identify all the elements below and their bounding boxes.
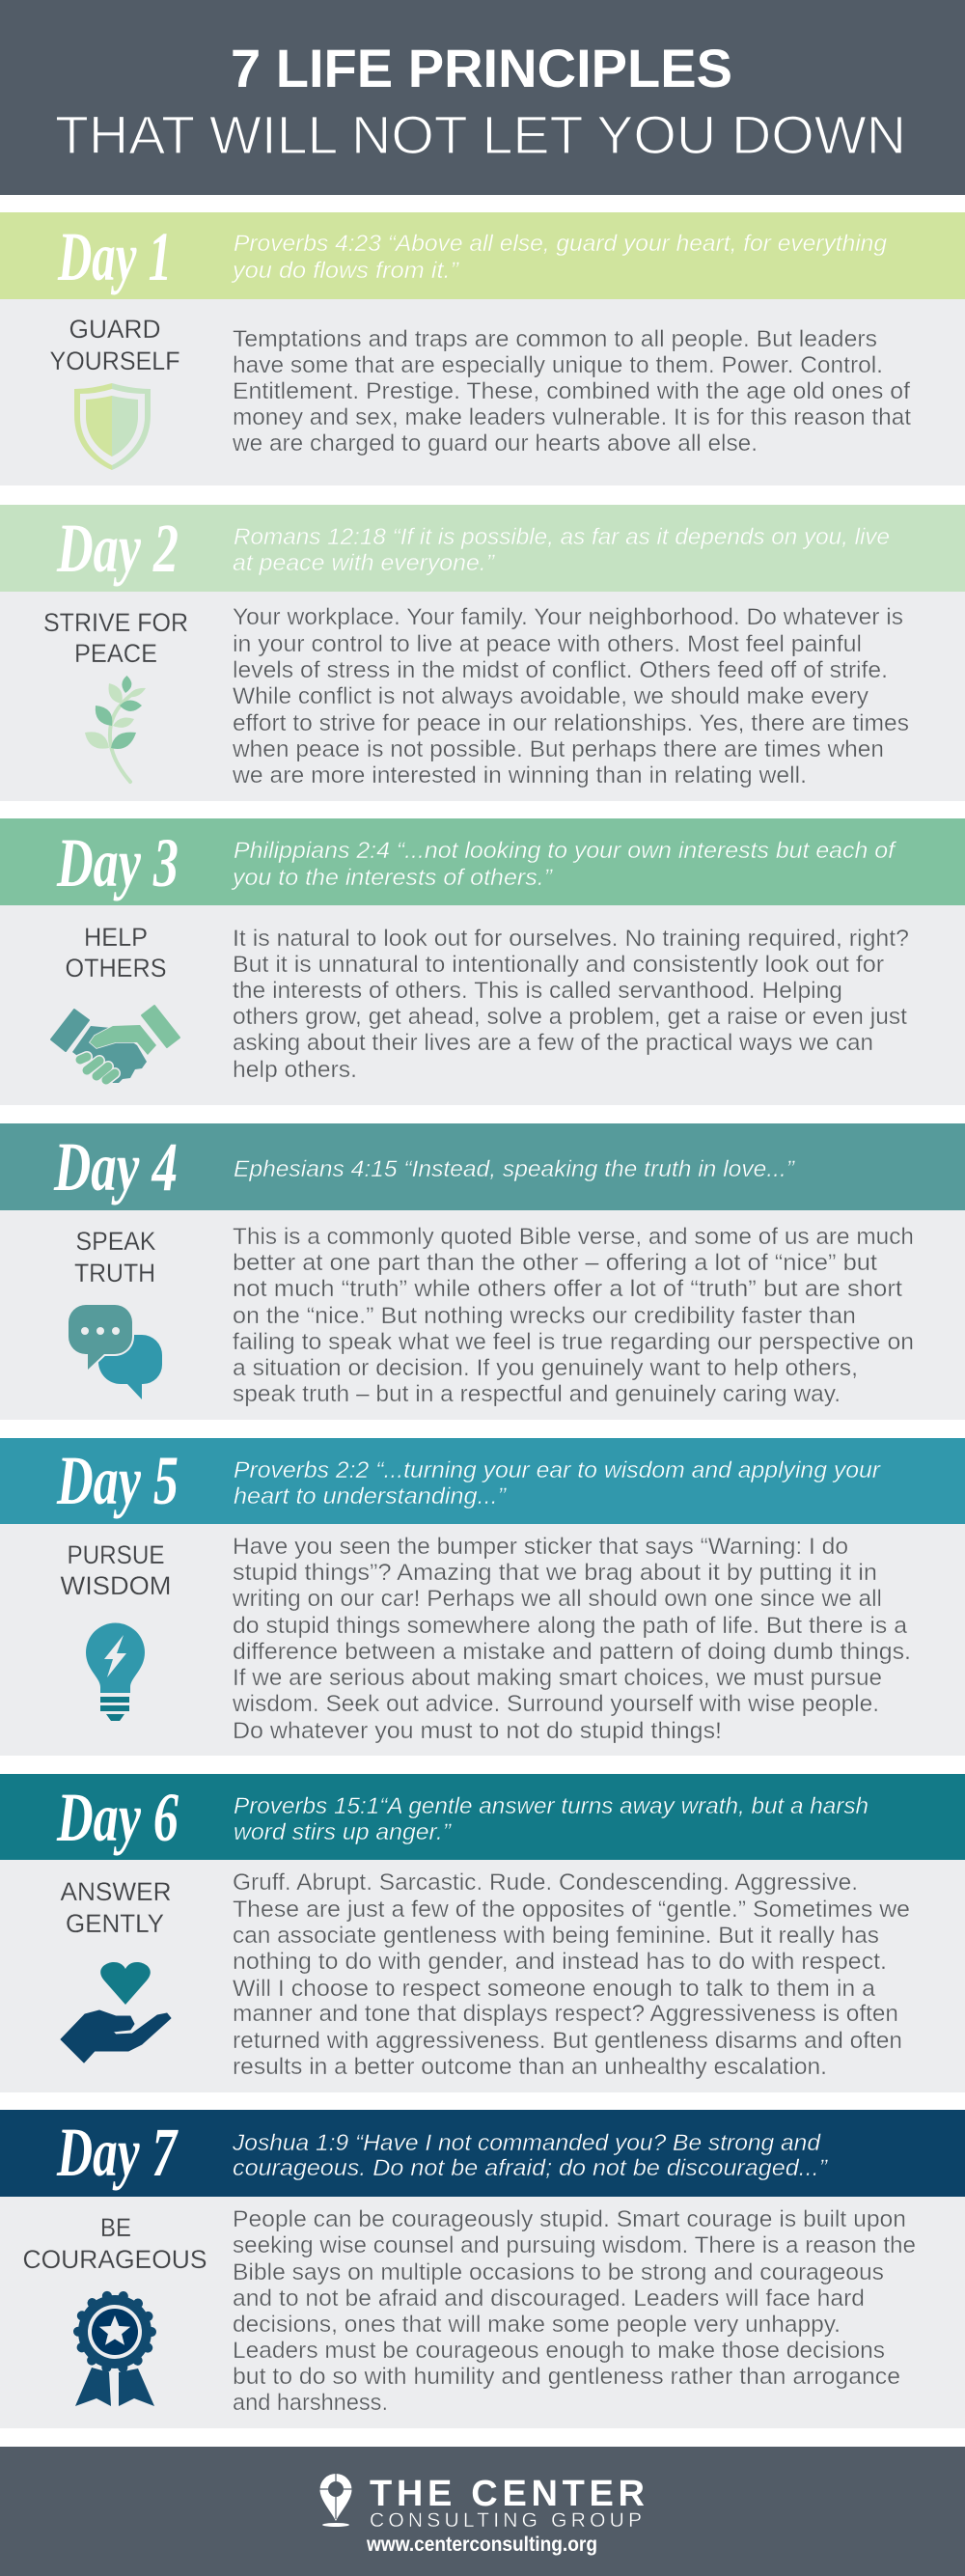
heading: guard yourself: GUARD: [69, 315, 160, 344]
body text: day 7: and harshness.: [233, 2390, 388, 2416]
heading: answer gently: ANSWER: [60, 1877, 172, 1906]
heading: be courageous: COURAGEOUS: [23, 2245, 207, 2274]
day 4 band: Day 4: [53, 1128, 178, 1205]
body text: day 7: seeking wise counsel and pursuing wisdom. There is a reason the: [233, 2232, 916, 2258]
logo wordmark: CONSULTING GROUP: [370, 2509, 642, 2532]
body text: day 5: [232, 1534, 911, 1744]
body text: day 4: on the “nice.” But nothing wrecks our credibility faster than: [233, 1303, 856, 1329]
day 5 band: heart to understanding...”: [234, 1483, 507, 1510]
day 3 band: [0, 818, 965, 905]
body text: day 5: Have you seen the bumper sticker that says “Warning: I do: [233, 1534, 848, 1560]
day 6 band: [0, 1774, 965, 1860]
panel: day 2 strive for peace: [0, 505, 965, 801]
body text: day 6: [233, 1870, 910, 2080]
day 5 band: Day 5: [56, 1442, 179, 1519]
heading: strive for peace: [43, 608, 188, 668]
icon: olive branch: [85, 676, 146, 782]
icon: handshake: [51, 1006, 179, 1083]
body text: day 1: Temptations and traps are common to all people. But leaders: [233, 326, 877, 352]
body text: day 3: help others.: [233, 1057, 357, 1083]
body text: day 3: others grow, get ahead, solve a problem, get a raise or even just: [233, 1004, 907, 1030]
heading: guard yourself: YOURSELF: [50, 346, 179, 375]
heading: answer gently: [60, 1877, 172, 1938]
body text: day 2: in your control to live at peace with others. Most feel painful: [233, 631, 862, 657]
heading: pursue wisdom: PURSUE: [68, 1540, 164, 1569]
body text: day 3: [233, 926, 909, 1083]
day 7 band: Day 7: [56, 2114, 179, 2191]
panel: day 4 speak truth: [0, 1123, 965, 1420]
body text: day 4: not much “truth” while others offer a lot of “truth” but are short: [233, 1276, 902, 1302]
logo wordmark: THE CENTER: [370, 2474, 645, 2514]
body text: day 5: difference between a mistake and pattern of doing dumb things.: [233, 1639, 911, 1665]
day 1 band: Proverbs 4:23 “Above all else, guard your heart, for everything: [234, 231, 888, 257]
day 5 band: Proverbs 2:2 “...turning your ear to wisdom and applying your: [234, 1457, 881, 1483]
body text: day 2: Your workplace. Your family. Your neighborhood. Do whatever is: [233, 604, 903, 630]
website url: www.centerconsulting.org: [366, 2534, 597, 2556]
body text: day 5: writing on our car! Perhaps we all should own one since we all: [232, 1586, 882, 1612]
body text: day 2: levels of stress in the midst of conflict. Others feed off of strife.: [233, 657, 888, 683]
day 3 band: Philippians 2:4 “...not looking to your own interests but each of: [234, 838, 896, 864]
heading: strive for peace: STRIVE FOR: [43, 608, 188, 637]
title: 7 LIFE PRINCIPLES: [231, 38, 732, 98]
body text: day 2: While conflict is not always avoidable, we should make every: [233, 683, 868, 709]
day 1 band: you do flows from it.”: [231, 258, 459, 284]
body text: day 6: can associate gentleness with being feminine. But it really has: [233, 1923, 879, 1949]
header banner: [0, 0, 965, 195]
heading: answer gently: GENTLY: [66, 1909, 164, 1938]
body text: day 1: [232, 326, 911, 457]
heading: strive for peace: PEACE: [74, 639, 157, 668]
body text: day 6: results in a better outcome than an unhealthy escalation.: [233, 2054, 827, 2080]
panel: day 1 guard yourself: [0, 212, 965, 485]
body text: day 7: [233, 2206, 916, 2416]
body text: day 7: and to not be afraid and discouraged. Leaders will face hard: [233, 2285, 865, 2312]
day 3 band: you to the interests of others.”: [231, 865, 553, 891]
icon: shield: [74, 383, 151, 470]
day 4 band: Ephesians 4:15 “Instead, speaking the truth in love...”: [234, 1156, 795, 1182]
day 1 band: Day 1: [57, 218, 172, 295]
body text: day 5: do stupid things somewhere along the path of life. But there is a: [233, 1613, 908, 1639]
body text: day 7: but to do so with humility and gentleness rather than arrogance: [233, 2364, 900, 2390]
icon: location pin logo: [319, 2474, 352, 2527]
body text: day 4: failing to speak what we feel is true regarding our perspective on: [233, 1329, 914, 1355]
icon: speech bubbles: [69, 1305, 162, 1399]
body text: day 5: stupid things”? Amazing that we brag about it by putting it in: [233, 1560, 877, 1586]
body text: day 1: we are charged to guard our hearts above all else.: [232, 430, 758, 457]
panel: day 6 answer gently: [0, 1774, 965, 2092]
body text: day 4: better at one part than the other – offering a lot of “nice” but: [233, 1250, 877, 1276]
panel: day 5 pursue wisdom: [0, 1438, 965, 1756]
body text: day 6: Gruff. Abrupt. Sarcastic. Rude. Condescending. Aggressive.: [233, 1870, 858, 1896]
heading: speak truth: SPEAK: [75, 1227, 156, 1256]
body text: day 3: the interests of others. This is called servanthood. Helping: [233, 978, 842, 1004]
heading: speak truth: [74, 1227, 156, 1288]
day 2 band: Day 2: [56, 510, 179, 587]
body text: day 4: [233, 1224, 914, 1407]
panel: day 3 help others: [0, 818, 965, 1105]
day 5 band: [0, 1438, 965, 1524]
body text: day 5: Do whatever you must to not do stupid things!: [233, 1718, 722, 1744]
body text: day 2: [232, 604, 909, 789]
body text: day 1: Entitlement. Prestige. These, combined with the age old ones of: [233, 378, 910, 404]
body text: day 7: decisions, ones that will make some people very unhappy.: [233, 2312, 841, 2338]
body text: day 4: a situation or decision. If you genuinely want to help others,: [233, 1355, 858, 1381]
body text: day 2: we are more interested in winning than in relating well.: [232, 762, 807, 789]
day 6 band: Day 6: [56, 1779, 179, 1856]
heading: help others: OTHERS: [66, 954, 166, 983]
heading: be courageous: [23, 2213, 207, 2274]
body text: day 5: wisdom. Seek out advice. Surround yourself with wise people.: [232, 1691, 879, 1717]
heading: speak truth: TRUTH: [74, 1259, 155, 1288]
body text: day 6: Will I choose to respect someone enough to talk to them in a: [233, 1976, 876, 2002]
day 1 band: [0, 212, 965, 299]
heading: help others: HELP: [84, 923, 148, 952]
panel: day 7 be courageous: [0, 2110, 965, 2428]
day 2 band: Romans 12:18 “If it is possible, as far as it depends on you, live: [234, 524, 890, 550]
body text: day 6: returned with aggressiveness. But gentleness disarms and often: [233, 2028, 902, 2054]
body text: day 1: have some that are especially unique to them. Power. Control.: [233, 352, 883, 378]
icon: award ribbon: [75, 2295, 154, 2406]
body text: day 5: If we are serious about making smart choices, we must pursue: [233, 1665, 882, 1691]
day 6 band: word stirs up anger.”: [234, 1819, 452, 1845]
body text: day 1: money and sex, make leaders vulnerable. It is for this reason that: [233, 404, 911, 430]
day 7 band: Joshua 1:9 “Have I not commanded you? Be strong and: [232, 2130, 821, 2156]
day 7 band: courageous. Do not be afraid; do not be discouraged...”: [233, 2155, 828, 2181]
day 6 band: Proverbs 15:1“A gentle answer turns away wrath, but a harsh: [234, 1793, 868, 1819]
body text: day 4: speak truth – but in a respectful and genuinely caring way.: [233, 1381, 841, 1407]
body text: day 3: But it is unnatural to intentionally and consistently look out for: [233, 952, 884, 978]
body text: day 2: effort to strive for peace in our relationships. Yes, there are times: [233, 710, 909, 736]
day 3 band: Day 3: [56, 824, 179, 901]
footer banner: [0, 2447, 965, 2576]
day 4 band: [0, 1123, 965, 1210]
body text: day 6: These are just a few of the opposites of “gentle.” Sometimes we: [233, 1897, 910, 1923]
body text: day 6: nothing to do with gender, and instead has to do with respect.: [233, 1949, 887, 1975]
day 2 band: [0, 505, 965, 592]
heading: pursue wisdom: [60, 1540, 172, 1600]
body text: day 6: manner and tone that displays respect? Aggressiveness is often: [233, 2001, 898, 2027]
icon: hand holding heart: [61, 1962, 171, 2063]
day 2 band: at peace with everyone.”: [233, 550, 495, 576]
body text: day 7: Bible says on multiple occasions to be strong and courageous: [233, 2259, 884, 2285]
heading: help others: [66, 923, 166, 983]
body text: day 3: asking about their lives are a few of the practical ways we can: [233, 1030, 873, 1056]
icon: light bulb: [86, 1622, 145, 1721]
title: THAT WILL NOT LET YOU DOWN: [55, 104, 906, 165]
title: [55, 38, 906, 165]
heading: be courageous: BE: [100, 2213, 131, 2242]
day 7 band: [0, 2110, 965, 2197]
body text: day 7: Leaders must be courageous enough to make those decisions: [233, 2338, 885, 2364]
heading: guard yourself: [50, 315, 179, 375]
body text: day 3: It is natural to look out for ourselves. No training required, right?: [233, 926, 909, 952]
body text: day 4: This is a commonly quoted Bible verse, and some of us are much: [233, 1224, 914, 1250]
body text: day 2: when peace is not possible. But perhaps there are times when: [232, 736, 884, 762]
heading: pursue wisdom: WISDOM: [60, 1571, 172, 1600]
body text: day 7: People can be courageously stupid. Smart courage is built upon: [233, 2206, 906, 2232]
